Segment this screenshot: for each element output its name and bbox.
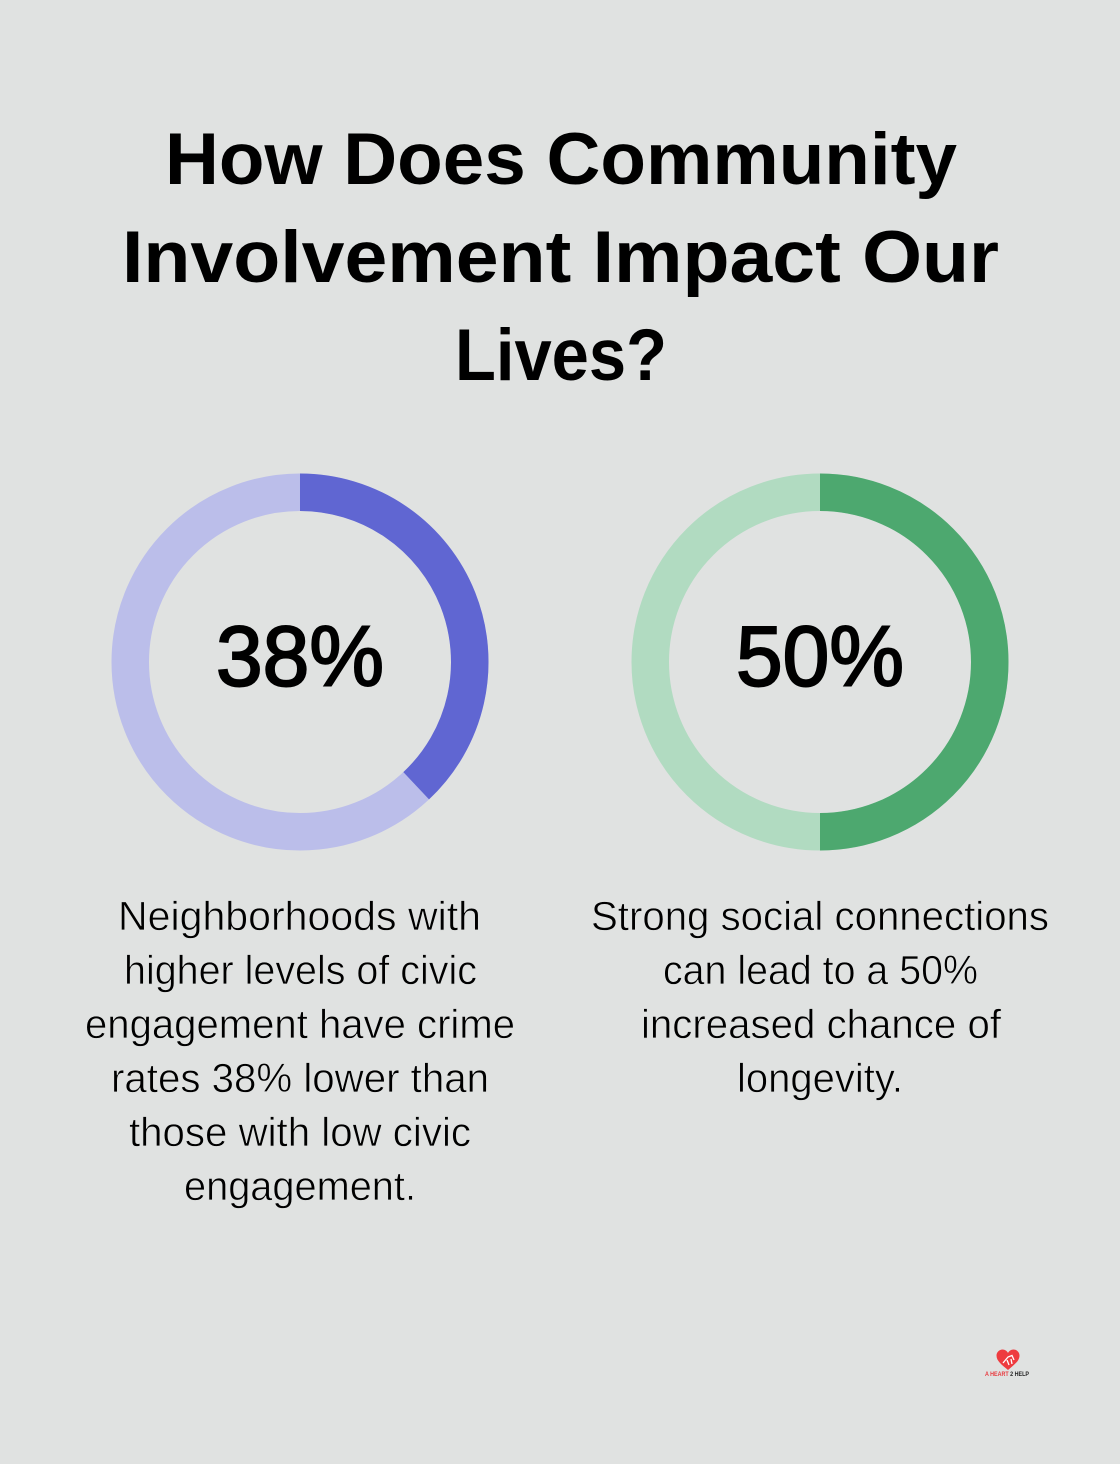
text block: crime statistic — [85, 893, 515, 1209]
text block: crime statistic: engagement have crime — [85, 1001, 515, 1047]
title: Involvement Impact Our — [122, 217, 999, 298]
text block: longevity statistic: can lead to a 50% — [663, 947, 978, 993]
donut chart: 50% — [650, 492, 990, 832]
donut chart: 38% — [130, 492, 470, 832]
text block: longevity statistic — [591, 893, 1049, 1101]
text block: longevity statistic: longevity. — [737, 1055, 903, 1101]
text block: crime statistic: higher levels of civic — [124, 947, 477, 993]
value: 50%: 50% — [736, 610, 904, 704]
title — [122, 119, 999, 396]
logo wordmark: A HEART 2 HELP — [985, 1372, 1029, 1378]
logo: A Heart 2 Help — [985, 1350, 1029, 1378]
title: Lives? — [455, 315, 667, 396]
value: 38%: 38% — [216, 610, 384, 704]
text block: crime statistic: those with low civic — [129, 1109, 471, 1155]
text block: crime statistic: rates 38% lower than — [111, 1055, 489, 1101]
title: How Does Community — [165, 119, 957, 200]
text block: longevity statistic: Strong social connections — [591, 893, 1049, 939]
icon: heart — [996, 1350, 1020, 1370]
text block: longevity statistic: increased chance of — [641, 1001, 1002, 1047]
text block: crime statistic: Neighborhoods with — [118, 893, 481, 939]
text block: crime statistic: engagement. — [184, 1163, 416, 1209]
